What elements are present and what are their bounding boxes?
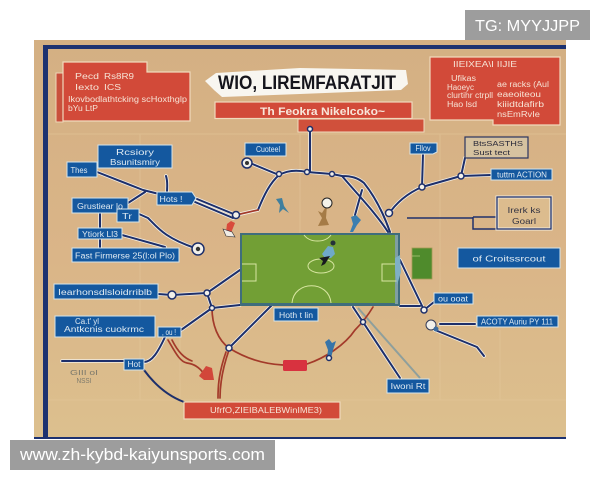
label: action: tuttm ACTION (497, 170, 547, 180)
figure with ball: brown (318, 198, 332, 226)
label: acoty: ACOTY Auriu PY 111 (481, 318, 554, 326)
panel: top-left red note: Pecd (75, 72, 99, 81)
label: iwoni (387, 379, 429, 393)
label: thes: Thes (70, 166, 88, 175)
label: hots (157, 192, 196, 205)
label: small ou: , ou ! (162, 328, 176, 337)
poster background (34, 40, 566, 439)
label: ytiork (78, 228, 122, 239)
connector network: white halo (62, 130, 491, 378)
label: antkcnis (55, 316, 155, 337)
subtitle red bars: Th Feokra Nikelcoko~ (260, 106, 386, 118)
label: thes (67, 162, 97, 177)
network nodes (168, 126, 464, 360)
mini pitch icon (412, 248, 432, 279)
player figure: blue upper right (350, 215, 361, 232)
panel: top-right red note: IIEIXEA\I IIJIE (453, 60, 517, 69)
player figure: upper left (276, 198, 289, 213)
label: iwoni: Iwoni Rt (390, 382, 426, 391)
panel: top-left red note: Ikovbodlathtcking scHoxthglp (68, 95, 188, 104)
red connector lines (168, 210, 373, 398)
panel: top-right red note: kiiidtdafirb (497, 100, 545, 109)
title banner: WIO, LIREMFARATJIT (218, 73, 396, 94)
panel: top-left red note: Rs8R9 (104, 72, 135, 81)
panel: top-left red note (56, 62, 190, 122)
plain text note: GIII oI (70, 370, 98, 377)
label: antkcnis: Ca.t' yl (75, 317, 99, 326)
label: grustiear: Grustiear lo (77, 202, 124, 211)
panel: top-right red note: Haoeyc (447, 83, 474, 92)
red arrowhead (199, 366, 214, 380)
label: right wide blue (458, 248, 560, 268)
panel: top-left red note: Iexto (75, 83, 100, 92)
label: pitch bottom tag (274, 308, 318, 321)
label: top center: Cuoteel (256, 145, 280, 154)
label: ou oodt: ou ooat (438, 294, 469, 304)
panel: top-right red note: nsEmRvIe (497, 110, 541, 119)
label: hot lower: Hot (128, 360, 141, 369)
watermark: bottom left: www.zh-kybd-kaiyunsports.com (19, 445, 265, 464)
label: ytiork: Ytiork Ll3 (82, 230, 119, 239)
label: grustiear (72, 198, 128, 213)
player on pitch (319, 240, 336, 266)
label: research: Rcsiory (116, 148, 154, 157)
label: ou oodt (434, 293, 473, 304)
panel: top-right red note: clurtihr ctrpll (447, 91, 493, 100)
watermark: bottom left (10, 440, 275, 470)
tan text box: Sust tect (473, 150, 510, 157)
tan text box (465, 137, 528, 158)
red pill (283, 360, 307, 371)
outlined box with callout line: Irerk ks (508, 206, 540, 215)
panel: top-right red note: eaeoiteou (497, 90, 541, 99)
connector network: navy lines (62, 130, 491, 402)
plain text note: NSSI (76, 378, 92, 385)
poster frame (34, 45, 566, 439)
plain text note (70, 370, 98, 385)
outlined box with callout line (407, 197, 551, 229)
label: hots: Hots ! (160, 195, 182, 204)
label: small ou (158, 327, 181, 337)
bottom red label (184, 402, 340, 419)
label: fllov: Fllov (416, 144, 430, 153)
watermark: top right (465, 10, 590, 40)
player figure: right goal (395, 255, 401, 285)
player figure: red (223, 221, 235, 237)
panel: top-right red note: ae racks (Aul (497, 80, 549, 89)
subtitle red bars (215, 102, 424, 132)
label: tr (117, 209, 139, 222)
label: pitch bottom tag: Hoth t lin (279, 311, 313, 320)
panel: top-right red note: Ufikas (451, 74, 476, 83)
panel: top-left red note: ICS (104, 83, 121, 92)
label: fast firmerse (72, 248, 179, 262)
label: antkcnis: Antkcnis cuokrmc (64, 325, 144, 334)
title banner (205, 68, 408, 97)
panel: top-left red note: bYu LtP (68, 104, 98, 113)
panel: top-right red note (430, 57, 560, 125)
outlined box with callout line: Goarl (512, 217, 536, 226)
football pitch (240, 233, 400, 306)
label: learhons (54, 284, 158, 299)
label: action (491, 169, 552, 180)
label: right wide blue: of Croitssrcout (472, 254, 547, 264)
watermark: top right: TG: MYYJJPP (475, 18, 580, 35)
label: top center (245, 143, 286, 156)
label: research (98, 145, 172, 168)
label: tr: Tr (122, 212, 132, 221)
bottom red label: UfrfO,ZIEIBALEBWinIME3) (210, 406, 322, 415)
panel: top-right red note: Hao lsd (447, 100, 477, 109)
label: hot lower (124, 359, 144, 370)
label: research: Bsunitsmiry (110, 158, 160, 167)
label: fllov (410, 143, 437, 154)
player figure: lower centre (325, 339, 336, 358)
tan text box: BtsSASTHS (473, 141, 523, 148)
label: learhons: Iearhonsdlsloidrriblb (58, 288, 153, 297)
label: fast firmerse: Fast Firmerse 25(l:ol Plo) (75, 252, 175, 260)
